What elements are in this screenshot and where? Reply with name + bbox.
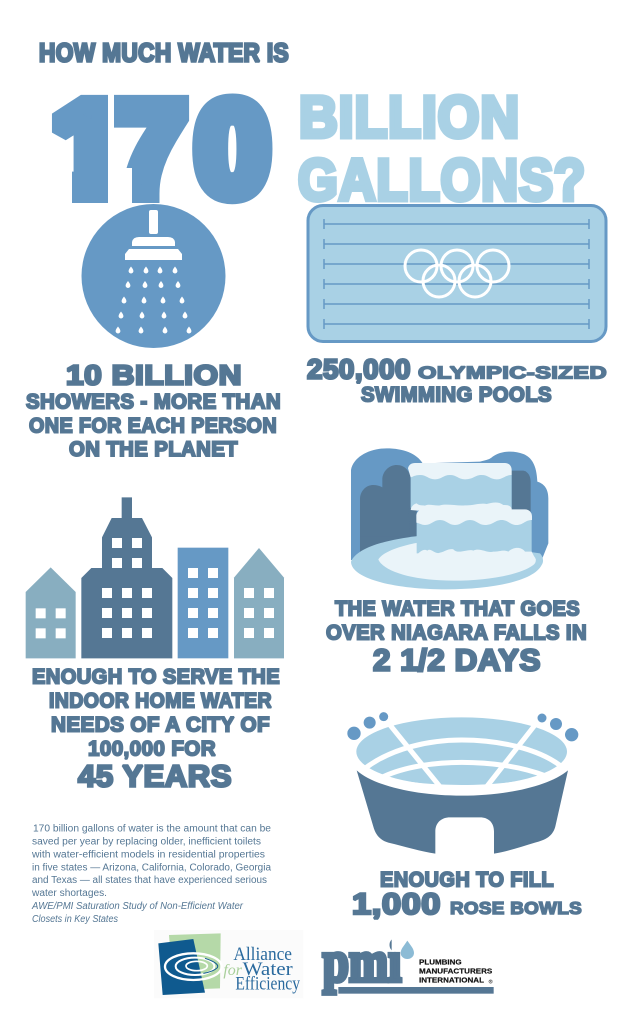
logo: alliance for water efficiency: Alliance bbox=[233, 944, 292, 965]
heading: billion: BILLION bbox=[299, 85, 520, 150]
icon: olympic swimming pool bbox=[308, 206, 606, 342]
logo: plumbing manufacturers international: MANUFACTURERS bbox=[419, 966, 492, 975]
text: city of 100,000 for 45 years: ENOUGH TO SERVE THE bbox=[32, 664, 280, 688]
text: niagara falls: OVER NIAGARA FALLS IN bbox=[326, 620, 587, 644]
text block: footnote: Closets in Key States bbox=[32, 914, 118, 925]
heading: gallons?: GALLONS? bbox=[298, 148, 586, 213]
text: city of 100,000 for 45 years bbox=[32, 664, 280, 794]
icon: rose bowl stadium bbox=[347, 712, 578, 854]
text: 250,000 olympic-sized swimming pools bbox=[307, 354, 607, 406]
text: 250,000 olympic-sized swimming pools: SWIMMING POOLS bbox=[361, 382, 552, 406]
logo: plumbing manufacturers international bbox=[323, 929, 494, 994]
text: city of 100,000 for 45 years: NEEDS OF A CITY OF bbox=[51, 712, 270, 736]
text: enough to fill 1,000 rose bowls: 1,000 bbox=[352, 888, 441, 921]
text: 250,000 olympic-sized swimming pools: OLYMPIC-SIZED bbox=[418, 362, 607, 382]
text: enough to fill 1,000 rose bowls: ENOUGH TO FILL bbox=[380, 868, 554, 892]
text block: footnote: with water-efficient models in residential properties bbox=[31, 850, 265, 860]
icon: niagara falls bbox=[351, 448, 548, 589]
text: 10 billion showers bbox=[26, 360, 281, 461]
text: niagara falls: THE WATER THAT GOES bbox=[335, 596, 580, 620]
logo: alliance for water efficiency: for bbox=[223, 962, 243, 979]
text block: footnote: saved per year by replacing older, inefficient toilets bbox=[32, 836, 261, 848]
text: enough to fill 1,000 rose bowls bbox=[352, 868, 582, 921]
icon: shower bbox=[82, 204, 226, 348]
logo: plumbing manufacturers international: ® bbox=[489, 979, 493, 986]
text: 10 billion showers: ON THE PLANET bbox=[69, 437, 238, 461]
text: city of 100,000 for 45 years: INDOOR HOME WATER bbox=[49, 688, 272, 712]
text: city of 100,000 for 45 years: 100,000 FOR bbox=[88, 736, 216, 760]
logo: alliance for water efficiency: Water bbox=[243, 959, 293, 980]
text: niagara falls: 2 1/2 DAYS bbox=[373, 644, 541, 678]
text: enough to fill 1,000 rose bowls: ROSE BOWLS bbox=[450, 898, 582, 918]
text block: footnote: 170 billion gallons of water is the amount that can be bbox=[33, 824, 271, 834]
icon: city buildings bbox=[26, 497, 284, 658]
text block: footnote bbox=[31, 824, 271, 925]
text: 10 billion showers: SHOWERS - MORE THAN bbox=[26, 390, 281, 414]
logo: plumbing manufacturers international: PLUMBING bbox=[419, 957, 462, 966]
text block: footnote: in five states — Arizona, California, Colorado, Georgia bbox=[32, 862, 271, 874]
text: 250,000 olympic-sized swimming pools: 250,000 bbox=[307, 354, 411, 384]
text: 10 billion showers: ONE FOR EACH PERSON bbox=[29, 414, 277, 438]
text block: footnote: AWE/PMI Saturation Study of Non-Efficient Water bbox=[31, 901, 244, 912]
logo: alliance for water efficiency: Efficiency bbox=[235, 974, 300, 995]
text: niagara falls bbox=[326, 596, 587, 678]
logo: plumbing manufacturers international: pmi bbox=[323, 929, 401, 994]
logo: alliance for water efficiency bbox=[154, 930, 303, 998]
heading: how much water is: HOW MUCH WATER IS bbox=[39, 40, 289, 68]
text: city of 100,000 for 45 years: 45 YEARS bbox=[78, 760, 232, 794]
big number: 170: 170 bbox=[52, 75, 269, 222]
text: 10 billion showers: 10 BILLION bbox=[66, 360, 242, 390]
text block: footnote: and Texas — all states that have experienced serious bbox=[32, 875, 267, 886]
text block: footnote: water shortages. bbox=[31, 888, 107, 899]
logo: plumbing manufacturers international: INTERNATIONAL bbox=[419, 976, 484, 985]
